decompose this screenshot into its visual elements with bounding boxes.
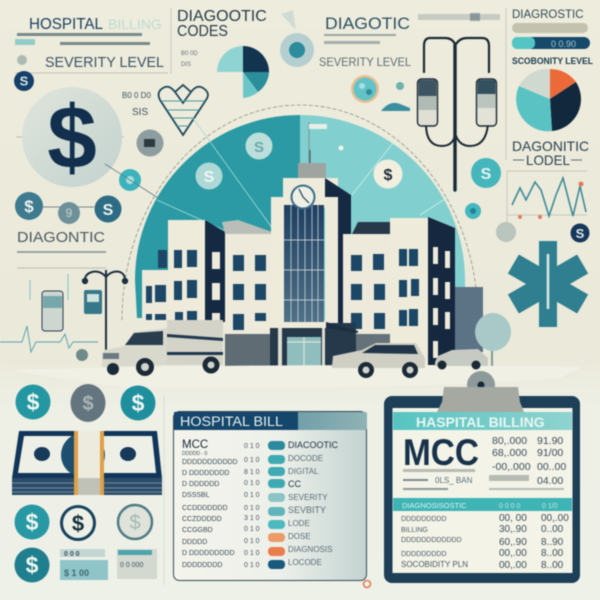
right column labels: DIAGNOSIS <box>288 545 332 554</box>
tags <box>60 549 157 580</box>
panel: clipboard: 00,.00 <box>541 513 569 524</box>
teal band: DIAGNOSISOSTIC <box>402 501 467 510</box>
left column codes: CCZDDDDD <box>182 516 222 523</box>
heading: severity level center: SEVERITY LEVEL <box>319 55 411 69</box>
far left wing <box>142 270 169 322</box>
thin teal lines lower left <box>30 274 68 300</box>
icon: small IV bag <box>42 291 63 331</box>
bar: teal navy: 0 0.90 <box>551 39 576 49</box>
clip <box>437 371 524 412</box>
icon: flag <box>309 122 327 165</box>
coin right <box>374 160 402 188</box>
band <box>74 431 104 495</box>
chart: teal pie <box>217 46 269 98</box>
right column labels: LODE <box>288 519 310 528</box>
icon: big dollar coin <box>16 87 124 187</box>
panel: diagnostic codes: DIAGOOTIC <box>177 8 267 25</box>
panel: hospital bill <box>174 412 367 580</box>
left column codes: CCDDDDDDD <box>182 505 228 512</box>
small icon <box>17 55 27 65</box>
teal band <box>393 498 572 511</box>
left main wing <box>225 234 272 334</box>
entrance <box>252 322 358 368</box>
side windows <box>212 247 450 358</box>
icon: small dark lock coin <box>136 130 164 156</box>
left column codes: D DDDDDDDD <box>182 470 229 477</box>
pills <box>268 441 285 569</box>
table rows <box>401 516 468 569</box>
coin left: S <box>204 169 215 186</box>
icon: small monitor <box>84 290 102 314</box>
icon: IV stand <box>418 38 496 190</box>
panel: hospital billing header <box>15 8 171 74</box>
icon: tree <box>475 313 511 368</box>
coins row top bottom-left <box>16 384 156 422</box>
middle column amounts: 0 1 0 <box>244 443 260 450</box>
coin: S <box>103 202 114 219</box>
icon: teal coin <box>471 158 501 188</box>
icon: money stack <box>12 431 162 495</box>
IV bag left <box>418 79 438 126</box>
clock <box>290 184 316 210</box>
panel: clipboard: 00,.00 <box>499 560 527 571</box>
middle column amounts: 0 1 0 <box>244 480 260 487</box>
big mcc: MCC <box>403 432 479 473</box>
left column codes: DSSSBL <box>182 492 210 499</box>
left column codes: CCGGBD <box>182 527 213 534</box>
amount rows <box>492 435 566 487</box>
heading: hospital: HOSPITAL <box>29 16 103 33</box>
building <box>142 150 483 368</box>
icon: small cloud shape <box>381 82 410 111</box>
ground plaza <box>14 365 582 388</box>
heading: faded billing: BILLING <box>108 16 162 32</box>
panel: diagnostic codes: B0 0D <box>181 51 198 57</box>
coin: $ <box>24 197 34 216</box>
panel: clipboard <box>384 371 580 583</box>
heading: diagrostic: DIAGROSTIC <box>512 9 584 21</box>
tag right: 0 0 000 <box>120 562 143 569</box>
heading bar <box>393 412 572 430</box>
table rows: DDDDDDDDDDDD <box>401 537 462 544</box>
coin: 9 <box>66 206 73 220</box>
right column labels: DIGITAL <box>288 467 319 476</box>
left column codes: DDDDD - 0 <box>182 451 207 457</box>
table rows: DDDDDDDDD <box>401 551 446 558</box>
icon: top target emblem <box>280 10 314 67</box>
label: small sis text: B0 0 D0 <box>122 91 151 100</box>
coin: $ <box>27 389 40 415</box>
icon: triangle hearts emblem <box>159 85 208 135</box>
coins row two <box>14 504 152 582</box>
tower glass <box>284 205 324 323</box>
coin right: $ <box>384 167 393 184</box>
heading: diagnostic top center: DIAGOTIC <box>325 15 410 33</box>
panel: right column top <box>506 8 593 160</box>
right main wing <box>343 234 390 334</box>
left column codes: MCC <box>182 439 208 451</box>
icon: big dollar coin: $ <box>47 87 97 187</box>
icon: ambulance <box>102 320 223 376</box>
teal band: 0 0 0 0 <box>499 503 521 510</box>
right block <box>390 218 429 368</box>
icon: teal coin: S <box>481 166 492 183</box>
icons: three coins row left <box>15 192 122 224</box>
heading: diagontic: DIAGONTIC <box>17 229 105 246</box>
icon: brain badge <box>351 75 379 103</box>
left column codes <box>182 439 238 569</box>
right column labels <box>288 440 339 567</box>
right column labels: CC <box>288 479 301 489</box>
coin: $ <box>132 390 145 416</box>
central tower <box>271 197 284 325</box>
icon: gray spiral coin <box>496 222 516 242</box>
right column labels: LOCODE <box>288 558 322 567</box>
left block <box>168 220 206 322</box>
table rows: BILLING <box>401 527 428 534</box>
left column codes: DDDDD <box>182 539 207 546</box>
panel: clipboard: 0..00 <box>541 524 564 535</box>
amount rows: 68,.000 <box>492 447 527 459</box>
heading: severity level: SEVERITY LEVEL <box>45 54 164 71</box>
panel: clipboard: 30,.90 <box>499 524 527 535</box>
panel: clipboard: 00, 00 <box>499 513 527 524</box>
coin left <box>196 162 222 190</box>
label: small sis text <box>122 91 151 118</box>
icon: navy coin right: S <box>576 226 585 241</box>
icon: coins in dome <box>196 132 402 190</box>
icon: small navy coin <box>14 71 34 91</box>
heading: sconbonity level: SCOBONITY LEVEL <box>512 56 593 66</box>
coin: $ <box>26 509 39 535</box>
coin ring: $ <box>72 511 84 536</box>
amount rows: 04.00 <box>537 475 563 487</box>
icon: suv <box>332 343 425 378</box>
middle column amounts: 8 1 0 <box>244 469 260 476</box>
IV bag right <box>476 79 496 126</box>
label: small sis text: SIS <box>132 107 148 118</box>
header bar <box>174 412 367 430</box>
table rows: DDDDDDDDD <box>401 516 446 523</box>
icon: lamp post <box>83 270 127 365</box>
panel: clipboard: 0LS_ BAN <box>435 476 473 485</box>
middle column amounts: 0 1 0 <box>244 526 260 533</box>
heading: diagnostic model <box>512 138 589 168</box>
chart: orange pie <box>516 69 581 131</box>
teal band: 0 1/0 <box>542 503 558 510</box>
heading: diagnostic model: LODEL <box>526 152 570 168</box>
icon: small car <box>435 349 488 370</box>
icon: navy coin right <box>570 224 590 242</box>
chart: ECG line <box>0 326 98 352</box>
tag left: $ 1 00 <box>64 568 89 578</box>
amount rows: 91/00 <box>537 447 563 459</box>
middle column amounts: 0 1 0 <box>244 492 260 499</box>
icon: star of life <box>508 241 588 327</box>
header bar: HOSPITAL BILL <box>180 414 284 429</box>
right column labels: DOSE <box>288 532 311 541</box>
panel: diagnostic codes: CODES <box>177 23 228 40</box>
amount rows: 91.90 <box>537 435 563 447</box>
windows <box>146 249 419 330</box>
left column codes: D DDDDDD <box>182 481 219 488</box>
amount rows: 80,.000 <box>492 435 527 447</box>
panel: clipboard: 8..00 <box>541 548 564 559</box>
panel: diagnostic codes <box>177 8 267 68</box>
heading: diagnostic model: DAGONITIC <box>512 138 589 154</box>
panel: clipboard: 00,.00 <box>499 548 527 559</box>
panel: clipboard: 8..00 <box>541 560 564 571</box>
heading: diagontic <box>17 229 106 268</box>
middle column amounts: 0 1 0 <box>244 457 260 464</box>
heading bar: HASPITAL BILLING <box>416 414 545 430</box>
icon: small navy coin: S <box>20 74 29 88</box>
coin top: S <box>254 139 264 156</box>
right column labels: DOCODE <box>288 454 323 463</box>
dome: background semicircle <box>122 105 478 320</box>
right column labels: DIACOOTIC <box>288 440 339 450</box>
left column codes: DDDDDDDD <box>182 562 222 569</box>
left column codes: DDDDDDDDDDD <box>182 459 238 466</box>
right column labels: SEVERITY <box>288 493 328 502</box>
small text rows <box>15 33 150 45</box>
rooftop left <box>222 220 272 234</box>
bar: gray <box>512 23 588 33</box>
coin: $ <box>26 552 39 578</box>
middle column amounts: 0 1 0 <box>244 505 260 512</box>
right column labels: SEVBITY <box>288 505 326 515</box>
coin top <box>246 132 272 160</box>
blurred lines <box>403 469 564 490</box>
chart: line chart <box>507 171 587 236</box>
middle column amounts: 0 1 0 <box>244 562 260 569</box>
table rows: SOCOBIDITY PLN <box>401 560 468 569</box>
coin: $ <box>82 393 94 415</box>
tag left <box>60 549 108 580</box>
heading: diagnostic top center <box>324 13 500 44</box>
amount rows: 00..00 <box>537 461 566 473</box>
back building <box>455 287 483 352</box>
middle column amounts <box>244 443 260 569</box>
bar: teal navy <box>512 37 590 49</box>
middle column amounts: 3 1 0 <box>244 515 260 522</box>
left column codes: D DDDDDDDDD <box>182 550 234 557</box>
icon: small orange ring <box>364 580 370 588</box>
middle column amounts: 0 1 0 <box>244 550 260 557</box>
decorative tree left <box>76 349 88 361</box>
amount rows: -00,.000 <box>492 461 531 473</box>
coin gray ring: $ <box>129 512 141 534</box>
panel: clipboard: 60,.90 <box>499 537 527 548</box>
panel: clipboard: 8..90 <box>541 537 564 548</box>
icon: small teal swirl <box>465 203 481 219</box>
tag left: 0 0 0 <box>64 551 80 558</box>
panel: diagnostic codes: DIS <box>181 62 191 68</box>
icon: teal link badge <box>119 169 141 191</box>
middle column amounts: 0 1 0 <box>244 538 260 545</box>
